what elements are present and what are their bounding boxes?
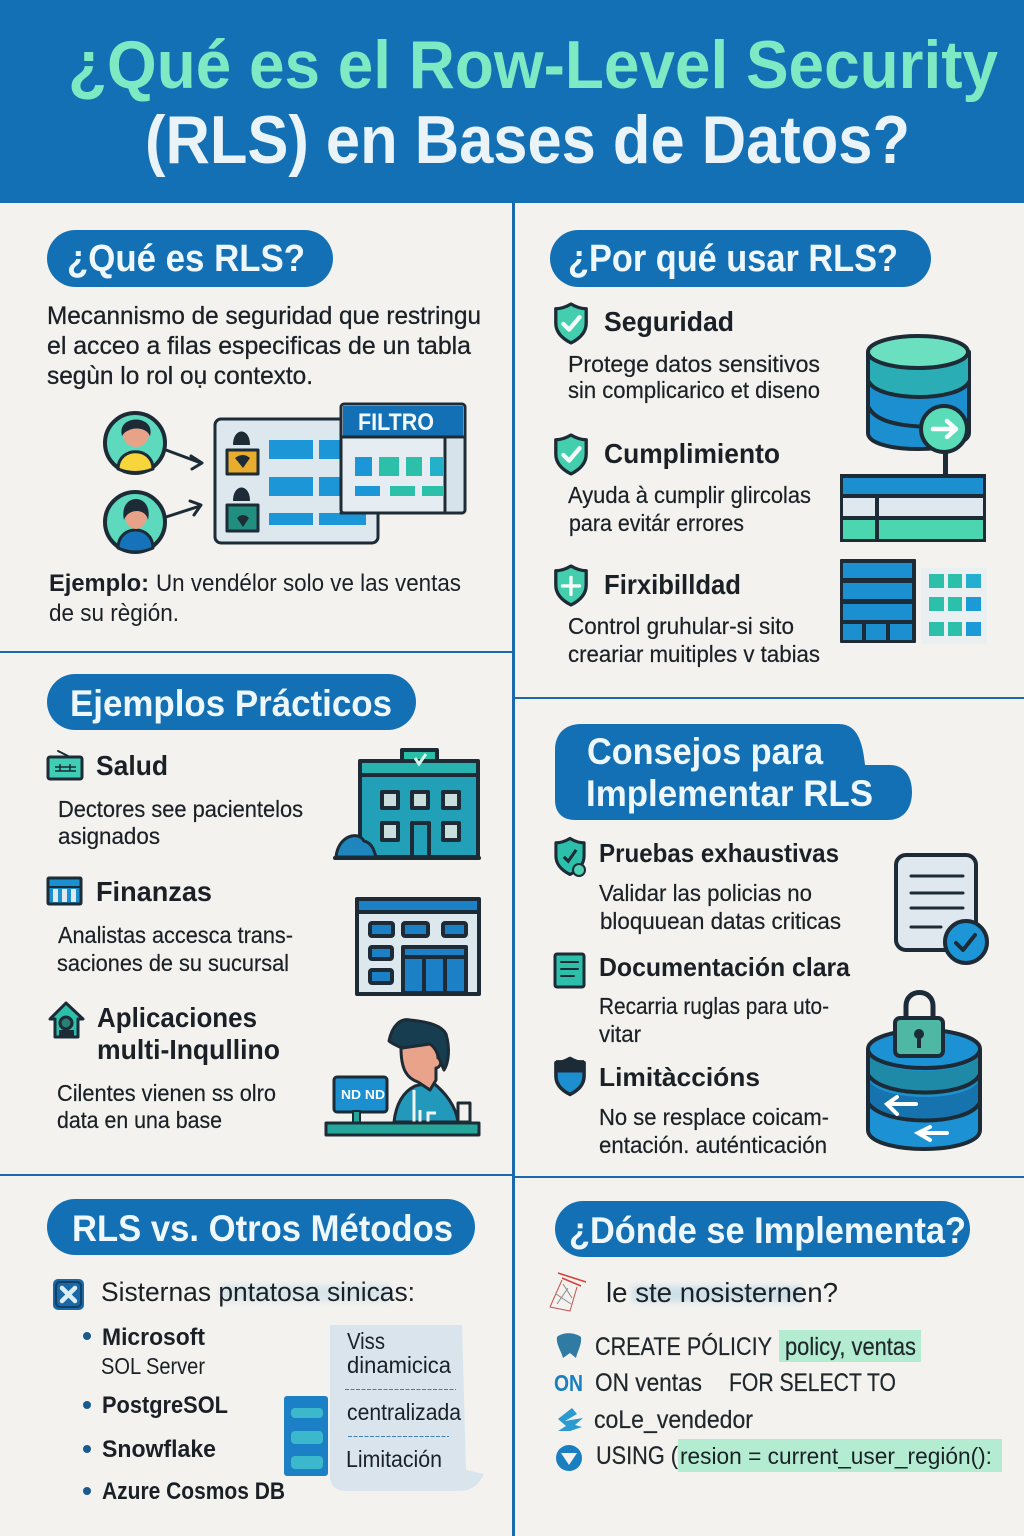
icon: locked database [868, 992, 980, 1149]
icon: red sketch [550, 1273, 586, 1311]
icon: finanzas [48, 878, 81, 904]
item: seguridad [556, 304, 820, 403]
data table [215, 419, 378, 543]
item: pruebas exhaustivas: Validar las policias no [599, 880, 812, 906]
list of database systems: PostgreSOL [102, 1392, 228, 1419]
code: create policy [557, 1330, 921, 1362]
icon: database with arrow [868, 336, 969, 475]
code: role vendedor: coLe_vendedor [594, 1406, 753, 1434]
item: salud: Dectores see pacientelos [58, 796, 303, 822]
code: using clause: resion = current_user_región(): [680, 1443, 992, 1469]
item: finanzas: saciones de su sucursal [57, 950, 289, 976]
item: aplicaciones multi-inquilino: Aplicaciones [97, 1002, 257, 1033]
definition text: el acceo a filas especificas de un tabla [47, 332, 471, 360]
heading: dónde se implementa: ¿Dónde se Implementa? [569, 1210, 966, 1251]
comparison note card: Viss [347, 1328, 385, 1354]
filter window: FILTRO [358, 409, 434, 436]
item: cumplimiento [556, 435, 811, 536]
heading: por qué usar RLS [550, 230, 931, 287]
title banner [0, 0, 1024, 203]
list of database systems [83, 1324, 285, 1505]
comparison note card: dinamicica [347, 1352, 451, 1378]
icon: x box [53, 1279, 84, 1310]
icon: bank branch [357, 899, 479, 994]
list of database systems: Microsoft [102, 1324, 205, 1351]
icon: blue server block [284, 1396, 328, 1476]
icon: salud [48, 751, 82, 779]
heading: ejemplos prácticos [47, 674, 416, 730]
heading: ejemplos prácticos: Ejemplos Prácticos [70, 683, 392, 724]
panel: dónde se implementa [550, 1201, 1002, 1472]
item: seguridad: sin complicarico et diseno [568, 377, 820, 403]
heading: qué es RLS: ¿Qué es RLS? [67, 238, 305, 280]
comparison note card: centralizada [347, 1399, 461, 1425]
item: finanzas [48, 876, 293, 976]
example text [49, 570, 461, 627]
icon: document with check [896, 855, 987, 963]
item: documentación clara: vitar [599, 1021, 641, 1047]
panel: ejemplos prácticos [47, 674, 479, 1135]
item: documentación clara: Documentación clara [599, 952, 851, 982]
panel: consejos para implementar [555, 724, 987, 1158]
item: documentación clara: Recarria ruglas para uto- [599, 993, 829, 1019]
item: pruebas exhaustivas [556, 838, 841, 934]
definition text: Mecannismo de seguridad que restringu [47, 302, 481, 330]
item: seguridad: Protege datos sensitivos [568, 351, 820, 377]
heading: consejos para implementar RLS [555, 724, 912, 820]
definition text: segùn lo rol oụ contexto. [47, 362, 313, 390]
icon: person at desk: ND ND [341, 1087, 385, 1102]
list of database systems: Azure Cosmos DB [102, 1478, 285, 1505]
panel: RLS vs otros métodos [47, 1199, 484, 1505]
item: finanzas: Finanzas [96, 876, 212, 907]
item: salud [48, 750, 303, 849]
icon: house [50, 1003, 83, 1037]
item: aplicaciones multi-inquilino: Cilentes vienen ss olro [57, 1080, 276, 1106]
comparison note card [330, 1325, 484, 1491]
item: limitaciones: entación. auténticación [599, 1132, 827, 1158]
item: seguridad: Seguridad [604, 306, 734, 337]
item: aplicaciones multi-inquilino [50, 1002, 280, 1133]
systems subheading: Sisternas pntatosa sinicas: [101, 1277, 415, 1307]
list of database systems: Snowflake [102, 1436, 216, 1463]
icon: person at desk [326, 1020, 479, 1135]
item: flexibilidad: Control gruhular-si sito [568, 613, 794, 639]
heading: consejos para implementar RLS: Consejos para [587, 731, 823, 772]
code: on ventas for select: ON ventas [595, 1369, 702, 1397]
item: pruebas exhaustivas: Pruebas exhaustivas [599, 838, 839, 868]
code: create policy: CREATE PÓLICIY [595, 1332, 772, 1361]
item: flexibilidad: Firxibilldad [604, 569, 741, 600]
icon: hospital [335, 750, 479, 858]
heading: RLS vs otros métodos [47, 1199, 475, 1255]
item: pruebas exhaustivas: bloquuean datas criticas [600, 908, 841, 934]
code: on ventas for select: ON [554, 1370, 583, 1396]
filter window [341, 404, 465, 513]
item: documentación clara [555, 952, 851, 1047]
item: limitaciones: No se resplace coicam- [599, 1104, 829, 1130]
item: aplicaciones multi-inquilino: data en una base [57, 1107, 222, 1133]
item: limitaciones [556, 1058, 829, 1158]
icon: user two [105, 492, 165, 552]
grid: colored cells [921, 568, 987, 644]
icon: shield check [556, 435, 586, 474]
comparison note card: Limitación [346, 1446, 442, 1472]
item: salud: asignados [58, 823, 160, 849]
icon: blue blob [557, 1333, 581, 1358]
icon: shield check [556, 304, 586, 343]
icon: shield check badge [556, 838, 585, 876]
item: finanzas: Analistas accesca trans- [58, 922, 293, 948]
item: limitaciones: Limitàccións [599, 1062, 760, 1092]
example text: Ejemplo: [49, 570, 149, 597]
icon: document [555, 954, 584, 987]
heading: consejos para implementar RLS: Implementar RLS [586, 773, 873, 814]
icon: blue splash [558, 1408, 583, 1431]
example text: Un vendélor solo ve las ventas [156, 570, 461, 597]
item: cumplimiento: para evitár errores [569, 510, 744, 536]
code: using clause [556, 1439, 1002, 1472]
item: salud: Salud [96, 750, 168, 781]
subheading with sketch icon: le ste nosisternen? [606, 1277, 838, 1308]
table: rows and columns [840, 474, 986, 542]
arrow: user two to table [166, 501, 201, 517]
heading: qué es RLS [47, 230, 333, 287]
grid: blue table [840, 559, 916, 643]
item: flexibilidad: creariar muitiples v tabias [568, 641, 820, 667]
subheading with sketch icon [550, 1273, 838, 1311]
item: flexibilidad [556, 566, 820, 667]
code: create policy: policy, ventas [785, 1333, 916, 1361]
code: on ventas for select [554, 1369, 896, 1397]
icon: shield plus [556, 566, 586, 605]
title banner: (RLS) en Bases de Datos? [145, 102, 910, 178]
icon: dark shield [556, 1058, 584, 1094]
list of database systems: SOL Server [101, 1353, 205, 1379]
illustration: users, table and filter [105, 404, 465, 552]
arrow: user one to table [166, 450, 202, 469]
item: cumplimiento: Ayuda à cumplir glircolas [568, 482, 811, 508]
item: aplicaciones multi-inquilino: multi-Inqullino [97, 1034, 280, 1065]
code: using clause: USING ( [596, 1442, 679, 1470]
panel: por qué usar RLS [550, 230, 987, 667]
panel: qué es RLS [47, 230, 481, 627]
code: on ventas for select: FOR SELECT TO [729, 1369, 896, 1397]
heading: dónde se implementa [555, 1201, 970, 1257]
icon: user one [105, 413, 165, 473]
heading: RLS vs otros métodos: RLS vs. Otros Métodos [72, 1208, 453, 1249]
heading: por qué usar RLS: ¿Por qué usar RLS? [568, 238, 898, 280]
item: cumplimiento: Cumplimiento [604, 438, 780, 469]
definition text [47, 302, 481, 390]
example text: de su règión. [49, 600, 179, 627]
icon: blue circle shield [556, 1445, 582, 1471]
